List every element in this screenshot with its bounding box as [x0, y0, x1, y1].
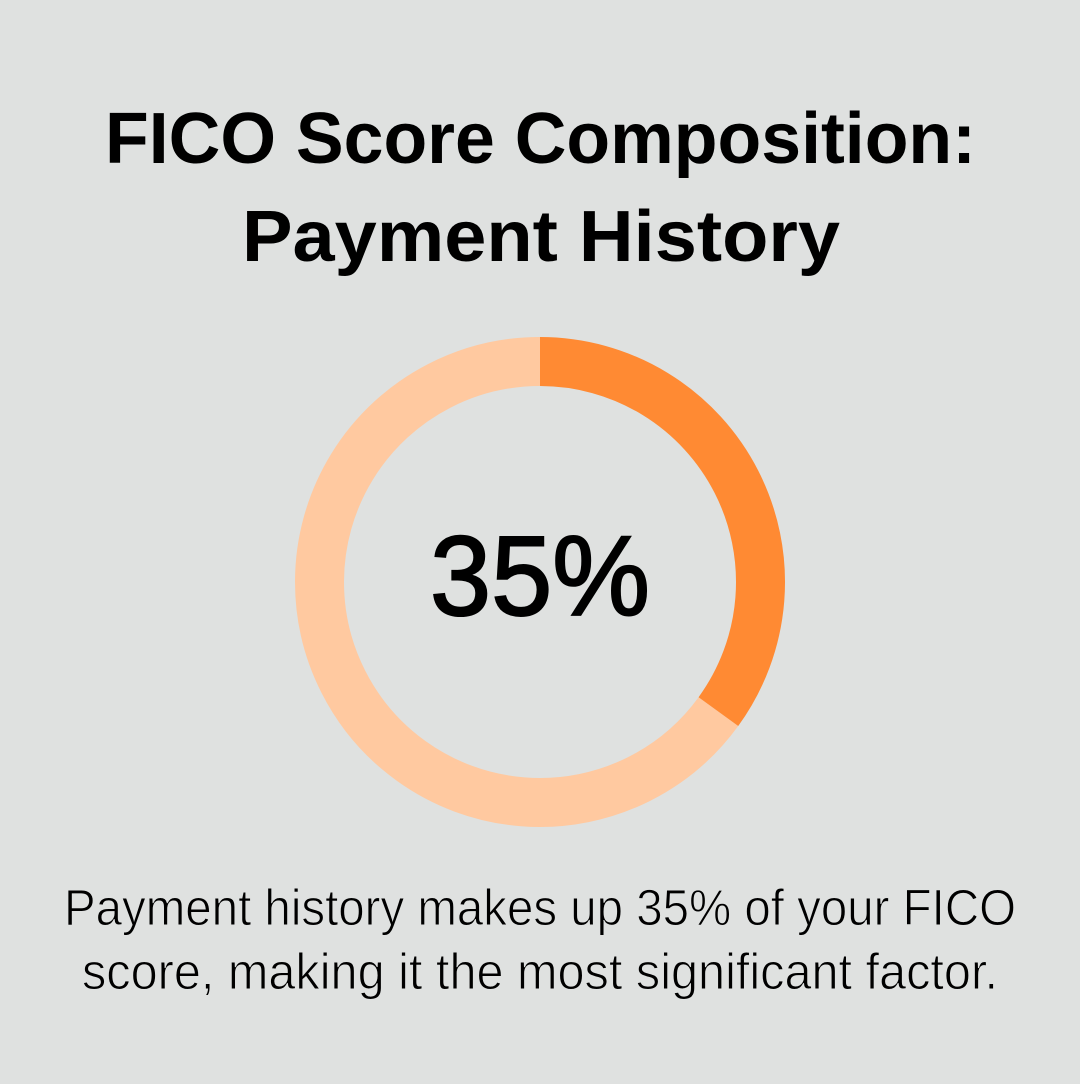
description text: Payment history makes up 35% of your FICO	[64, 879, 1016, 936]
title: Payment History	[242, 197, 840, 277]
title	[105, 99, 976, 277]
donut remainder: 65 percent	[320, 362, 718, 803]
title: FICO Score Composition:	[105, 99, 976, 179]
donut segment: 35 percent	[540, 362, 761, 712]
donut chart: 35 percent	[320, 362, 761, 803]
description text: score, making it the most significant factor.	[82, 943, 998, 1000]
center value: 35%	[430, 513, 650, 639]
description text	[64, 879, 1016, 1000]
